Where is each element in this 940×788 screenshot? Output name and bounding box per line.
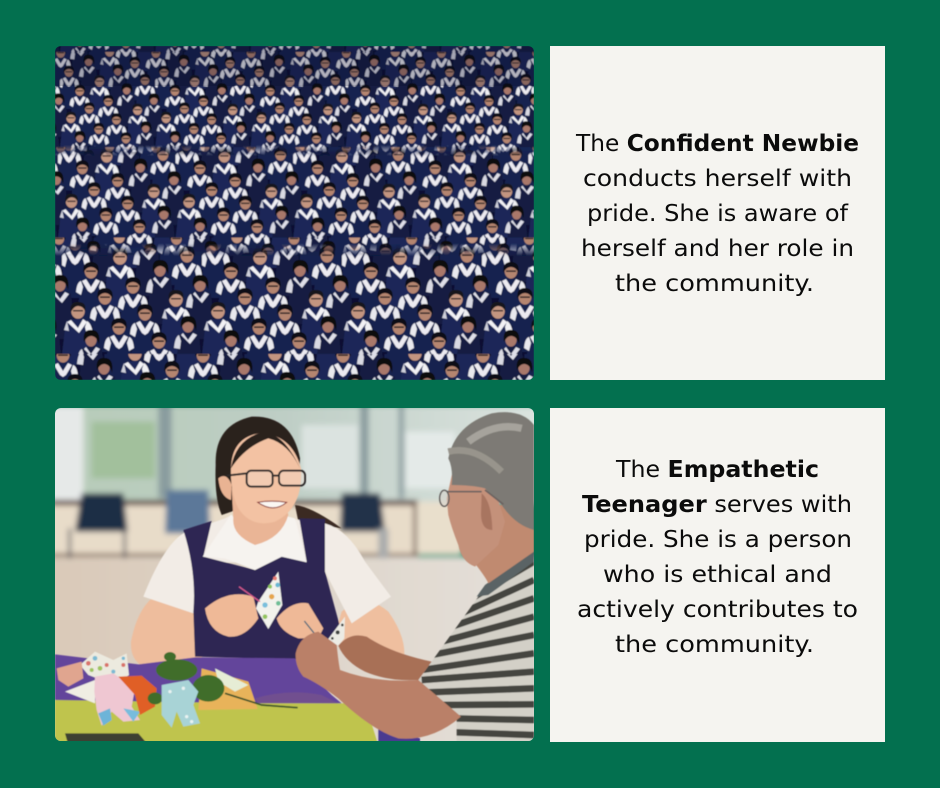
- icon: student: [131, 417, 404, 666]
- photo: students standing in assembly: [55, 46, 534, 380]
- panel: Confident Newbie text: pride. She is aware of: [587, 199, 849, 227]
- icon: origami flowers and greenery: [57, 652, 298, 728]
- background room: [48, 405, 542, 747]
- panel: Empathetic Teenager text: The Empathetic: [615, 455, 819, 483]
- icon: origami butterfly: [239, 572, 345, 646]
- panel: Confident Newbie text: The Confident Newbie: [575, 129, 859, 157]
- panel: Empathetic Teenager text: actively contributes to: [577, 595, 858, 623]
- panel: Empathetic Teenager text: [550, 408, 885, 742]
- panel: Confident Newbie text: herself and her role in: [581, 234, 854, 262]
- panel: Empathetic Teenager text: Teenager serves with: [582, 490, 852, 518]
- panel: Empathetic Teenager text: the community.: [615, 630, 814, 658]
- icon: table with purple and yellow cloth: [55, 654, 420, 745]
- panel: Confident Newbie text: the community.: [615, 269, 814, 297]
- panel: Confident Newbie text: [550, 46, 885, 380]
- photo: student folding origami with an elderly man: [55, 408, 534, 741]
- panel: Empathetic Teenager text: who is ethical and: [603, 560, 832, 588]
- icon: elderly man in striped shirt: [296, 412, 534, 745]
- panel: Confident Newbie text: conducts herself with: [583, 164, 852, 192]
- panel: Empathetic Teenager text: pride. She is a person: [584, 525, 852, 553]
